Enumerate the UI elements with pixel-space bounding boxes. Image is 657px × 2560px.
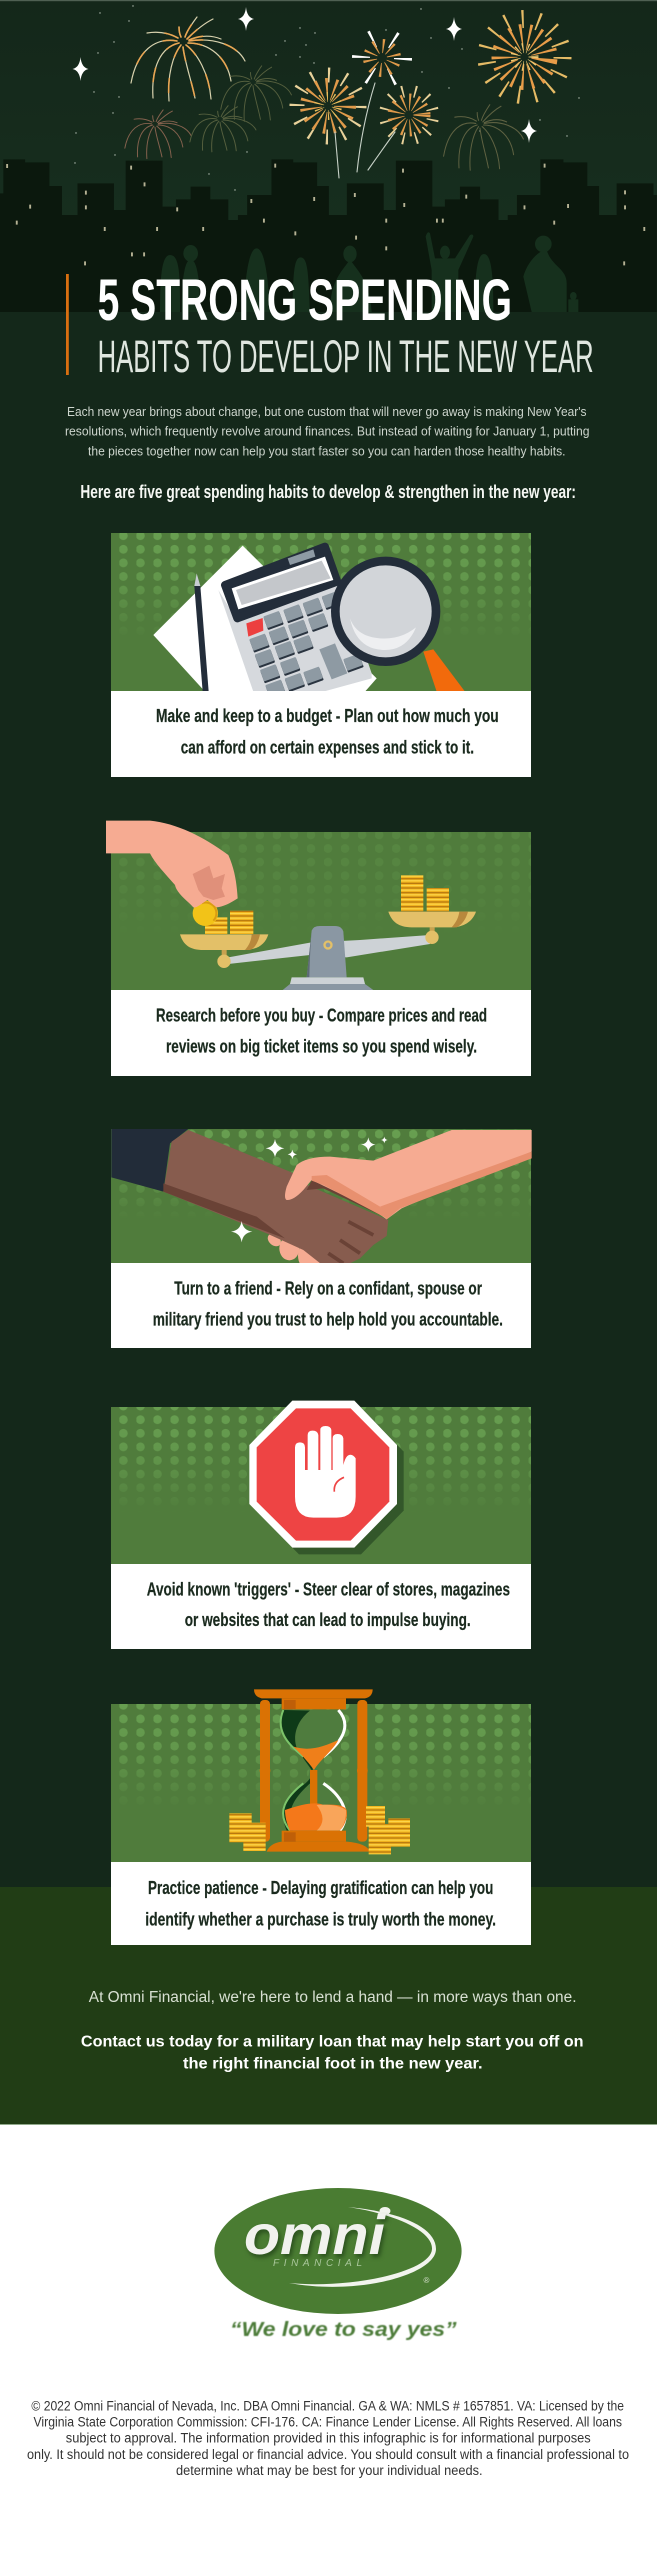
- caption: military friend you trust to help hold you accountable.: [153, 1310, 503, 1330]
- panel 3: friend: [111, 1129, 532, 1348]
- hero: fireworks over city skyline: [0, 6, 657, 312]
- closing message: [81, 1989, 584, 2073]
- panel 4: triggers: [111, 1401, 531, 1649]
- icon: handshake with sparkles: [111, 1129, 532, 1271]
- intro paragraph: resolutions, which frequently revolve around finances. But instead of waiting for January 1, putting: [65, 424, 590, 439]
- firework: small orange burst: [381, 87, 437, 143]
- firework: large dome: [131, 17, 245, 101]
- firework: white burst: [361, 37, 403, 79]
- logo: Omni Financial: ®: [424, 2276, 430, 2285]
- caption: can afford on certain expenses and stick to it.: [181, 738, 474, 758]
- legal disclaimer: only. It should not be considered legal or financial advice. You should consult with a financial professional to: [27, 2447, 629, 2462]
- title block: [66, 268, 594, 382]
- logo: Omni Financial: FINANCIAL: [273, 2258, 362, 2269]
- legal disclaimer: subject to approval. The information provided in this infographic is for informational purposes: [66, 2431, 591, 2446]
- orange accent bar: [66, 274, 69, 375]
- intro paragraph: Each new year brings about change, but one custom that will never go away is making New Year's: [67, 404, 587, 419]
- city skyline: [0, 159, 657, 312]
- firework: orange burst left: [297, 75, 359, 137]
- caption: Avoid known 'triggers' - Steer clear of stores, magazines: [147, 1579, 510, 1599]
- small stars: [75, 6, 579, 190]
- call to action: the right financial foot in the new year.: [183, 2056, 483, 2073]
- caption: Make and keep to a budget - Plan out how much you: [156, 706, 499, 726]
- caption: [145, 1878, 496, 1929]
- closing message: At Omni Financial, we're here to lend a hand — in more ways than one.: [89, 1989, 577, 2006]
- sparkle stars: [72, 7, 537, 143]
- icon: calculator, paper, pencil and magnifier: [153, 546, 465, 699]
- legal disclaimer: determine what may be best for your individual needs.: [176, 2463, 483, 2478]
- panel 2: research: [106, 821, 531, 1076]
- caption: [156, 706, 499, 758]
- caption: [156, 1005, 487, 1057]
- tagline: “We love to say yes”: [230, 2319, 457, 2341]
- icon: stop sign with hand: [249, 1401, 404, 1554]
- caption: reviews on big ticket items so you spend wisely.: [166, 1037, 477, 1057]
- intro paragraph: the pieces together now can help you start faster so you can harden those healthy habits.: [88, 443, 566, 458]
- icon: hand placing coin on balance scale: [106, 821, 476, 990]
- call to action: [81, 2034, 584, 2073]
- icon: hourglass with coin stacks: [229, 1689, 410, 1854]
- caption: Practice patience - Delaying gratification can help you: [148, 1878, 493, 1898]
- call to action: Contact us today for a military loan that may help start you off on: [81, 2034, 584, 2051]
- firework: large gold burst right: [486, 19, 562, 95]
- caption: [147, 1579, 510, 1630]
- caption: Turn to a friend - Rely on a confidant, spouse or: [174, 1278, 482, 1298]
- logo: Omni Financial: omni: [244, 2203, 387, 2266]
- caption: or websites that can lead to impulse buying.: [185, 1610, 471, 1630]
- crowd silhouettes: [160, 232, 578, 312]
- panel 1: budget: [111, 533, 531, 777]
- caption: [153, 1278, 503, 1330]
- panel 5: patience: [111, 1689, 531, 1945]
- firework trails: [335, 83, 395, 178]
- intro paragraph: [65, 404, 590, 458]
- legal disclaimer: [27, 2399, 629, 2478]
- firework: dim domes: [125, 66, 523, 170]
- logo: Omni Financial: [214, 2188, 462, 2341]
- caption: Research before you buy - Compare prices and read: [156, 1005, 487, 1025]
- caption: identify whether a purchase is truly worth the money.: [145, 1909, 496, 1929]
- lit windows: [7, 164, 644, 265]
